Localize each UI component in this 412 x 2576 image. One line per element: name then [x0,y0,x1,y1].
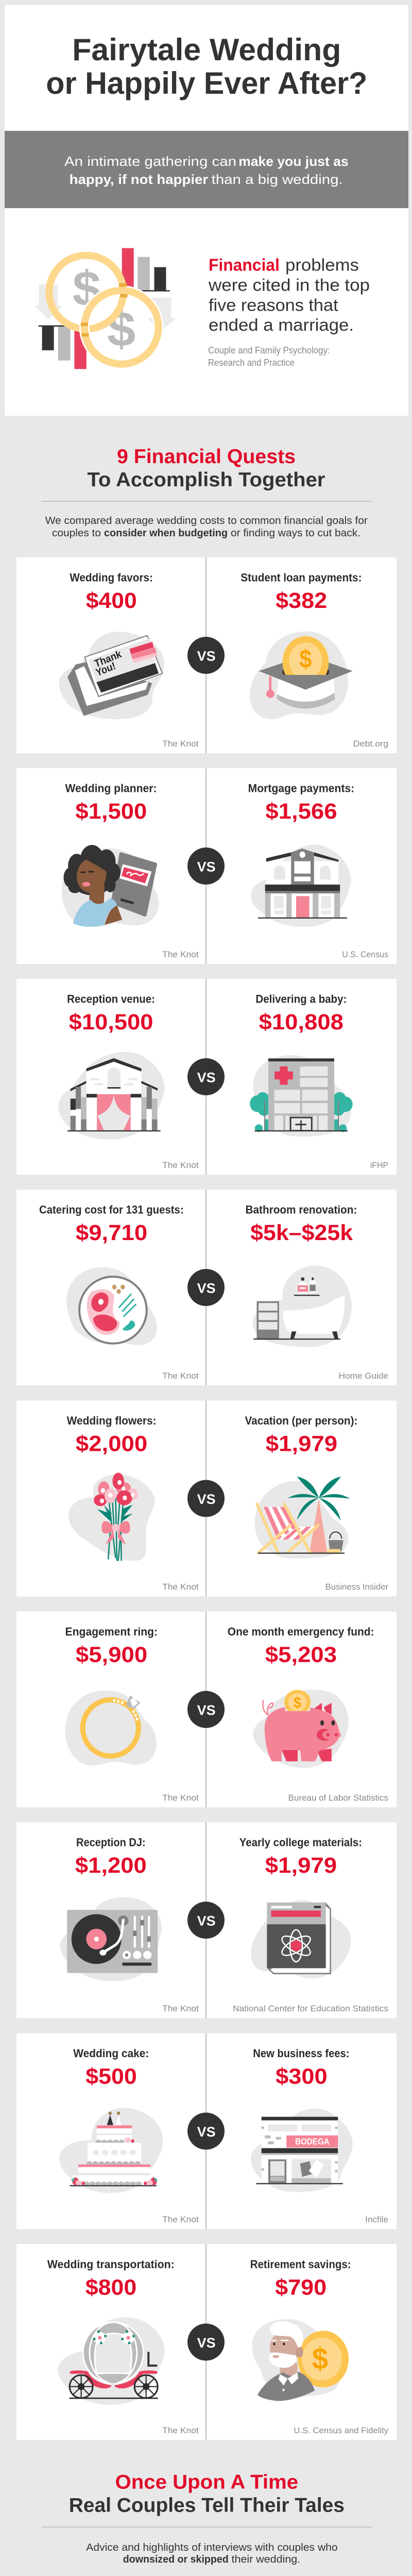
banner: intimate gathering: happy, if not happier [70,172,208,187]
icon: graduation cap with coin: $ [299,645,312,673]
vacation cost: Vacation (per person): [245,1414,357,1427]
heading: once upon a time: Real Couples Tell Their Tales [69,2495,345,2516]
bathroom cost [245,1204,388,1381]
vs badge [187,1058,225,1095]
wedding flowers cost: The Knot [162,1583,199,1592]
wedding cake cost: Wedding cake: [73,2047,149,2060]
panel: quest 7 dj vs college [16,1822,397,2018]
text: stories intro: their wedding. [232,2554,300,2565]
reception venue cost: Reception venue: [67,992,155,1006]
emergency fund cost: $5,203 [265,1642,337,1667]
wedding favors cost [70,571,199,749]
delivering a baby cost: Delivering a baby: [255,992,347,1006]
catering cost: The Knot [162,1371,199,1381]
wedding favors cost: Wedding favors: [70,571,153,584]
vs badge: VS [197,2124,216,2140]
text: financial problems: problems [285,256,359,274]
icon: bouquet [68,1473,154,1561]
reception venue cost: $10,500 [69,1010,153,1035]
vs badge: VS [197,859,216,875]
bathroom cost: Home Guide [339,1371,388,1381]
vs badge: VS [197,1702,216,1718]
vacation cost: Business Insider [325,1583,389,1592]
wedding cake cost [73,2047,199,2225]
engagement ring cost [65,1625,199,1803]
delivering a baby cost: $10,808 [259,1010,344,1035]
vs badge [187,1902,225,1939]
vs badge [187,2112,225,2149]
transportation cost: $800 [85,2275,136,2300]
delivering a baby cost [255,992,388,1170]
mortgage cost [248,782,388,959]
title: or Happily Ever After? [46,66,367,100]
heading: 9 financial quests: 9 Financial Quests [117,446,296,468]
engagement ring cost: $5,900 [76,1642,147,1667]
student loan cost: Student loan payments: [241,571,362,584]
icon: piggy bank: $ [294,1693,301,1711]
reception dj cost [75,1836,199,2013]
icon: bodega storefront: BODEGA [295,2137,330,2147]
icon: bathtub [253,1266,352,1347]
transportation cost [47,2258,199,2435]
transportation cost: The Knot [162,2426,199,2435]
reception venue cost: The Knot [162,1161,199,1170]
student loan cost: Debt.org [353,739,388,749]
new business cost: $300 [276,2064,328,2089]
vs badge: VS [197,1492,216,1507]
vs badge: VS [197,1913,216,1929]
text: financial problems: were cited in the top [208,275,370,294]
vs badge: VS [197,2335,216,2350]
student loan cost [241,571,388,749]
wedding planner cost: $1,500 [75,799,147,824]
panel: quest 6 ring vs emergency fund [16,1612,397,1807]
icon: house [251,844,351,927]
bathroom cost: Bathroom renovation: [245,1204,357,1216]
icon: retiree with coin [252,2319,349,2401]
wedding planner cost: The Knot [162,950,199,959]
icon: rings with dollar signs and bars [34,248,176,369]
retirement savings cost [250,2258,389,2435]
icon: textbook [251,1900,351,1978]
panel: intro [5,5,408,416]
heading: 9 financial quests: To Accomplish Together [87,469,325,491]
vs badge [187,637,225,674]
mortgage cost: Mortgage payments: [248,782,354,794]
new business cost: New business fees: [253,2047,349,2060]
vs badge [187,2324,225,2361]
icon: bodega storefront [251,2109,353,2192]
text: quests intro: We compared average wedding costs to common financial goals for [45,515,368,527]
catering cost [39,1204,199,1381]
panel: quest 9 transportation vs retirement [16,2244,397,2440]
icon: thank you cards [59,632,164,719]
icon: piggy bank [253,1690,349,1768]
text: quests intro: or finding ways to cut back. [231,528,360,539]
wedding planner cost: Wedding planner: [65,782,157,794]
reception dj cost: The Knot [162,2004,199,2013]
panel: quest 8 cake vs business [16,2033,397,2229]
emergency fund cost: One month emergency fund: [228,1625,374,1638]
catering cost: $9,710 [76,1221,147,1245]
new business cost: Incfile [365,2215,388,2225]
vs badge [187,1691,225,1728]
heading: once upon a time: Once Upon A Time [115,2471,298,2494]
text: financial problems: five reasons that [209,295,338,314]
mortgage cost: U.S. Census [342,950,388,959]
text: quests intro [45,515,368,539]
heading: once upon a time [69,2471,345,2516]
reception venue cost [67,992,199,1170]
retirement savings cost: $790 [275,2275,327,2300]
vacation cost [245,1414,389,1592]
icon: turntable [60,1897,162,1981]
icon: beach chair and palm [255,1477,350,1558]
title: Fairytale Wedding [72,32,341,67]
new business cost [253,2047,388,2225]
icon: reception venue [58,1052,164,1140]
text: stories intro [86,2542,338,2565]
wedding flowers cost: Wedding flowers: [67,1414,157,1427]
icon: rings with dollar signs and bars: $ [73,261,101,316]
transportation cost: Wedding transportation: [47,2258,175,2271]
emergency fund cost: Bureau of Labor Statistics [288,1793,388,1803]
college materials cost [233,1836,388,2013]
title [46,32,367,100]
wedding favors cost: The Knot [162,739,199,749]
wedding flowers cost: $2,000 [76,1431,147,1456]
vs badge: VS [197,1281,216,1296]
text: stories intro: downsized or skipped [123,2554,229,2565]
reception dj cost: Reception DJ: [76,1836,146,1849]
banner: intimate gathering [5,131,408,208]
text: quests intro: consider when budgeting [104,528,228,539]
text: quests intro: couples to [52,528,101,539]
retirement savings cost: Retirement savings: [250,2258,351,2271]
icon: retiree with coin: $ [312,2342,328,2376]
heading: 9 financial quests [87,446,325,491]
wedding favors cost: $400 [86,588,137,613]
vacation cost: $1,979 [266,1431,337,1456]
student loan cost: $382 [276,588,327,613]
icon: wedding planner woman [62,845,159,927]
icon: thank you cards: You! [94,660,117,679]
panel: quest 1 favors vs student loans [16,557,397,753]
vs badge [187,1269,225,1306]
college materials cost: $1,979 [265,1853,337,1878]
banner: intimate gathering: An intimate gathering can [64,154,236,169]
text: stories intro: Advice and highlights of interviews with couples who [86,2542,338,2553]
banner: intimate gathering: make you just as [238,154,349,169]
wedding flowers cost [67,1414,199,1592]
text: financial problems: Financial [209,256,280,274]
icon: dinner plate [66,1267,157,1345]
icon: hospital [250,1055,353,1137]
source: psychology journal [208,345,330,368]
text: financial problems: ended a marriage. [209,315,354,334]
panel: quest 5 flowers vs vacation [16,1400,397,1596]
banner: intimate gathering: than a big wedding. [212,172,343,187]
engagement ring cost: Engagement ring: [65,1625,158,1638]
wedding planner cost [65,782,199,959]
vs badge: VS [197,648,216,664]
panel: quest 2 planner vs mortgage [16,768,397,964]
emergency fund cost [228,1625,388,1803]
vs badge: VS [197,1070,216,1085]
text: financial problems [208,256,370,334]
wedding cake cost: The Knot [162,2215,199,2225]
panel: quest 4 catering vs bathroom [16,1190,397,1385]
college materials cost: National Center for Education Statistics [233,2004,388,2013]
icon: rings with dollar signs and bars: $ [107,301,135,357]
source: psychology journal: Couple and Family Psychology: [208,345,330,355]
icon: carriage [58,2317,164,2405]
icon: graduation cap with coin [250,632,353,719]
mortgage cost: $1,566 [265,799,337,824]
bathroom cost: $5k–$25k [250,1221,353,1245]
wedding cake cost: $500 [85,2064,137,2089]
reception dj cost: $1,200 [75,1853,147,1878]
vs badge [187,1480,225,1517]
catering cost: Catering cost for 131 guests: [39,1204,184,1216]
delivering a baby cost: iFHP [370,1161,388,1170]
icon: engagement ring [65,1690,157,1766]
icon: thank you cards: Thank [93,648,123,670]
college materials cost: Yearly college materials: [239,1836,362,1849]
source: psychology journal: Research and Practice [208,358,295,368]
panel: quest 3 venue vs baby [16,979,397,1175]
icon: wedding cake [59,2108,163,2193]
vs badge [187,848,225,885]
retirement savings cost: U.S. Census and Fidelity [294,2426,389,2435]
engagement ring cost: The Knot [162,1793,199,1803]
